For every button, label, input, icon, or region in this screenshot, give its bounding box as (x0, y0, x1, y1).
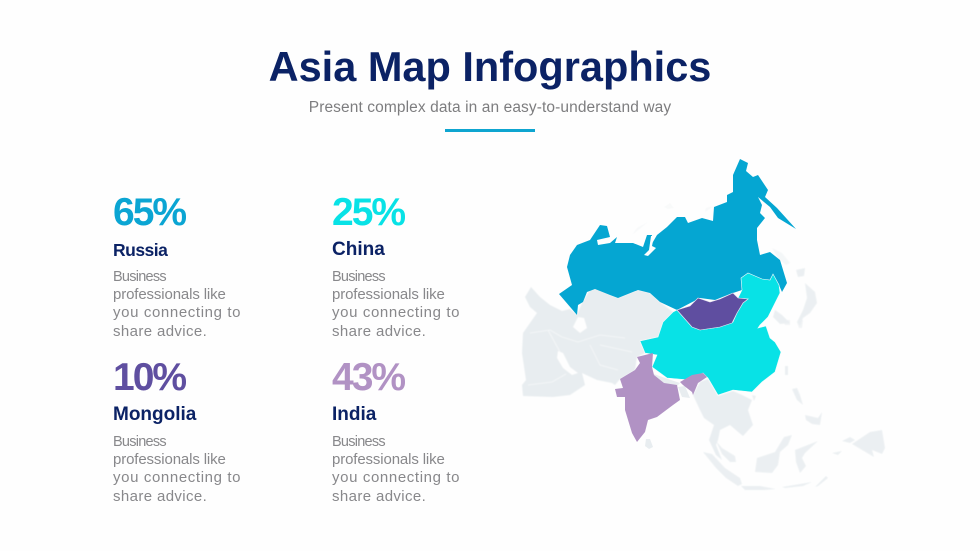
stat card: Mongolia (113, 356, 241, 505)
description: China: share advice. (332, 323, 426, 340)
country name: China: China (332, 238, 385, 260)
percentage: 65%: 65% (113, 191, 185, 234)
description: China: you connecting to (332, 304, 460, 321)
region: Gulf gap (557, 351, 578, 375)
description: Russia: Business (113, 268, 166, 284)
region: Nepal and Bangladesh (654, 374, 690, 398)
description: China (332, 268, 460, 340)
region: Indonesia, Malaysia, Philippines, New Guinea and Japan islands (632, 203, 885, 490)
title: Asia Map Infographics (269, 43, 711, 90)
description: Mongolia (113, 434, 241, 505)
region: Sri Lanka (645, 439, 653, 449)
country: India (615, 353, 707, 442)
percentage: 43%: 43% (332, 356, 404, 399)
region: western and central Asia (522, 287, 680, 397)
description: Russia (113, 268, 241, 340)
country name: India: India (332, 404, 376, 424)
accent rule (445, 129, 535, 132)
country: Mongolia (677, 293, 748, 330)
description: India (332, 434, 460, 505)
region: south-east Asia mainland (693, 379, 753, 460)
stat card: Russia (113, 191, 241, 340)
subtitle: Present complex data in an easy-to-understand way (309, 98, 671, 116)
description: Mongolia: professionals like (113, 451, 226, 468)
country name: Mongolia: Mongolia (113, 404, 196, 424)
percentage: 25%: 25% (332, 191, 404, 234)
description: India: share advice. (332, 488, 426, 505)
description: Mongolia: Business (113, 434, 166, 450)
description: India: Business (332, 434, 385, 450)
region: Caspian gap (573, 317, 587, 333)
description: Mongolia: you connecting to (113, 469, 241, 486)
description: India: you connecting to (332, 469, 460, 486)
description: China: Business (332, 268, 385, 284)
stat card: India (332, 356, 460, 505)
description: India: professionals like (332, 451, 445, 468)
country: China (640, 273, 781, 395)
description: Russia: share advice. (113, 323, 207, 340)
description: Russia: professionals like (113, 286, 226, 303)
inlet: Ob gulf (644, 236, 656, 256)
description: Russia: you connecting to (113, 304, 241, 321)
stat card: China (332, 191, 460, 340)
country name: Russia: Russia (113, 240, 167, 260)
description: Mongolia: share advice. (113, 488, 207, 505)
description: China: professionals like (332, 286, 445, 303)
country: Russia (559, 159, 796, 315)
percentage: 10%: 10% (113, 356, 185, 399)
